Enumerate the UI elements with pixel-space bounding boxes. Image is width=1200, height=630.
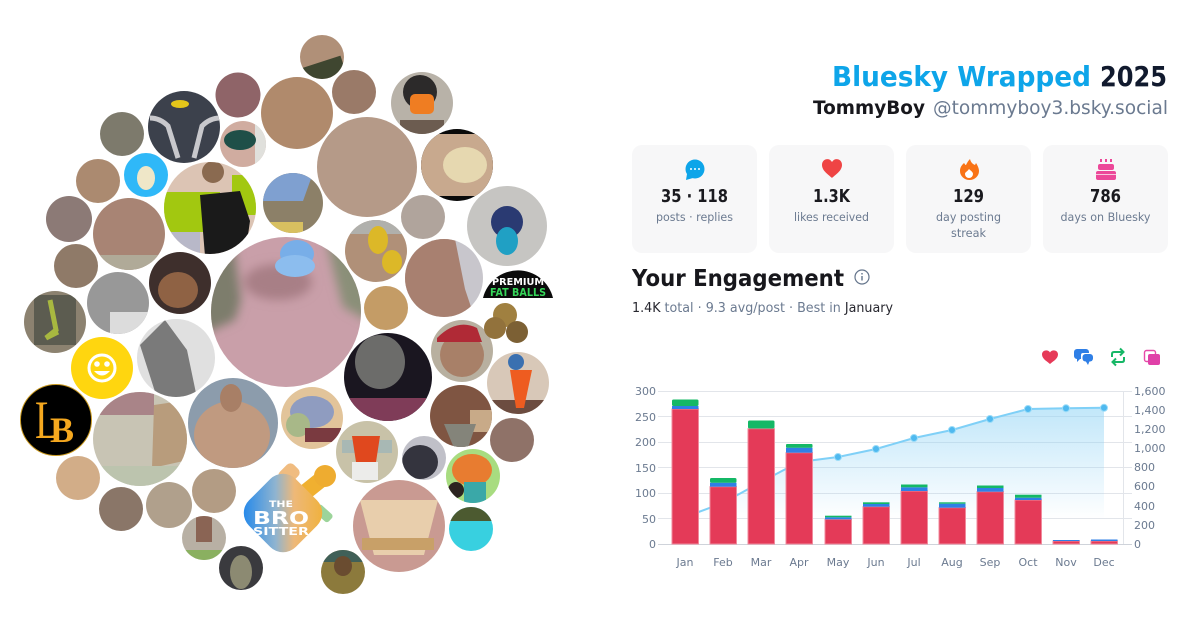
title: Bluesky Wrapped xyxy=(832,60,1091,93)
right axis labels: 400 xyxy=(1134,500,1155,513)
month labels: Nov xyxy=(1055,556,1077,569)
icon: legend replies xyxy=(1074,349,1093,365)
avatar: the bro sitter blob xyxy=(236,461,336,560)
icon: legend reposts xyxy=(1112,348,1124,366)
month labels: May xyxy=(827,556,850,569)
month labels: Apr xyxy=(789,556,809,569)
avatar: LB logo xyxy=(20,384,92,456)
chart grid xyxy=(658,391,1132,544)
month labels: Mar xyxy=(751,556,772,569)
left axis labels: 100 xyxy=(635,487,656,500)
avatar: yellow smiley xyxy=(71,337,133,399)
right axis labels: 800 xyxy=(1134,461,1155,474)
right axis labels: 200 xyxy=(1134,519,1155,532)
stat card: posts and replies: posts · replies xyxy=(656,210,733,224)
heading: your engagement: Your Engagement xyxy=(631,266,844,292)
month labels: Dec xyxy=(1093,556,1115,569)
stat card: day posting streak: 129 xyxy=(953,187,984,207)
month labels: Jun xyxy=(866,556,885,569)
right axis labels: 1,400 xyxy=(1134,404,1166,417)
icon: legend likes xyxy=(1042,350,1058,364)
stacked bars xyxy=(672,400,1118,544)
avatar: the bro sitter blob: BRO xyxy=(253,508,309,529)
stat card: posts and replies: 35 · 118 xyxy=(661,187,728,207)
left axis labels: 200 xyxy=(635,436,656,449)
right axis labels: 600 xyxy=(1134,480,1155,493)
avatar: the bro sitter blob: THE xyxy=(269,500,293,510)
avatar: premium fat balls: PREMIUM xyxy=(492,277,544,288)
icon: info xyxy=(855,270,869,284)
stat card: days on Bluesky: days on Bluesky xyxy=(1060,210,1151,224)
stat card: days on Bluesky: 786 xyxy=(1090,187,1121,207)
title: 2025 xyxy=(1100,60,1167,93)
right axis labels: 0 xyxy=(1134,538,1141,551)
icon: flame xyxy=(960,159,979,180)
avatar: the bro sitter blob: SITTER xyxy=(253,525,310,538)
month labels: Oct xyxy=(1018,556,1038,569)
chart legend xyxy=(1042,348,1160,366)
icon: heart xyxy=(822,159,842,178)
month labels: Jul xyxy=(906,556,921,569)
month labels xyxy=(676,556,1115,569)
user handle xyxy=(813,97,1168,119)
month labels: Aug xyxy=(941,556,963,569)
right axis labels xyxy=(1134,385,1166,551)
left axis labels: 0 xyxy=(649,538,656,551)
cumulative area and line xyxy=(685,404,1108,520)
stat card: likes received: 1.3K xyxy=(813,187,851,207)
combo chart: monthly engagement xyxy=(635,385,1166,569)
circle pack of avatars xyxy=(24,35,550,594)
right axis labels: 1,000 xyxy=(1134,442,1166,455)
left axis labels xyxy=(635,385,656,551)
stat card: likes received xyxy=(769,145,894,253)
month labels: Feb xyxy=(713,556,733,569)
stat card: day posting streak: streak xyxy=(951,226,986,240)
stat card: likes received: likes received xyxy=(794,210,869,224)
left axis labels: 150 xyxy=(635,462,656,475)
icon: cake xyxy=(1096,159,1116,180)
left axis labels: 50 xyxy=(642,513,656,526)
left axis labels: 300 xyxy=(635,385,656,398)
avatar: LB logo: B xyxy=(50,410,74,450)
engagement summary: 1.4K total · 9.3 avg/post · Best in January xyxy=(632,301,893,316)
user handle: TommyBoy xyxy=(813,97,926,119)
stat card: day posting streak: day posting xyxy=(936,210,1001,224)
left axis labels: 250 xyxy=(635,411,656,424)
user handle: @tommyboy3.bsky.social xyxy=(933,97,1168,119)
right axis labels: 1,200 xyxy=(1134,423,1166,436)
stat card: days on Bluesky xyxy=(1043,145,1168,253)
month labels: Sep xyxy=(980,556,1000,569)
icon: legend quotes xyxy=(1144,350,1160,365)
avatar: LB logo: L xyxy=(35,390,59,450)
right axis labels: 1,600 xyxy=(1134,385,1166,398)
stat card: posts and replies xyxy=(632,145,757,253)
avatar: premium fat balls: FAT BALLS xyxy=(490,287,546,299)
month labels: Jan xyxy=(676,556,694,569)
avatar: premium fat balls xyxy=(483,270,553,343)
icon: chat bubble xyxy=(686,160,704,180)
stat card: day posting streak xyxy=(906,145,1031,253)
